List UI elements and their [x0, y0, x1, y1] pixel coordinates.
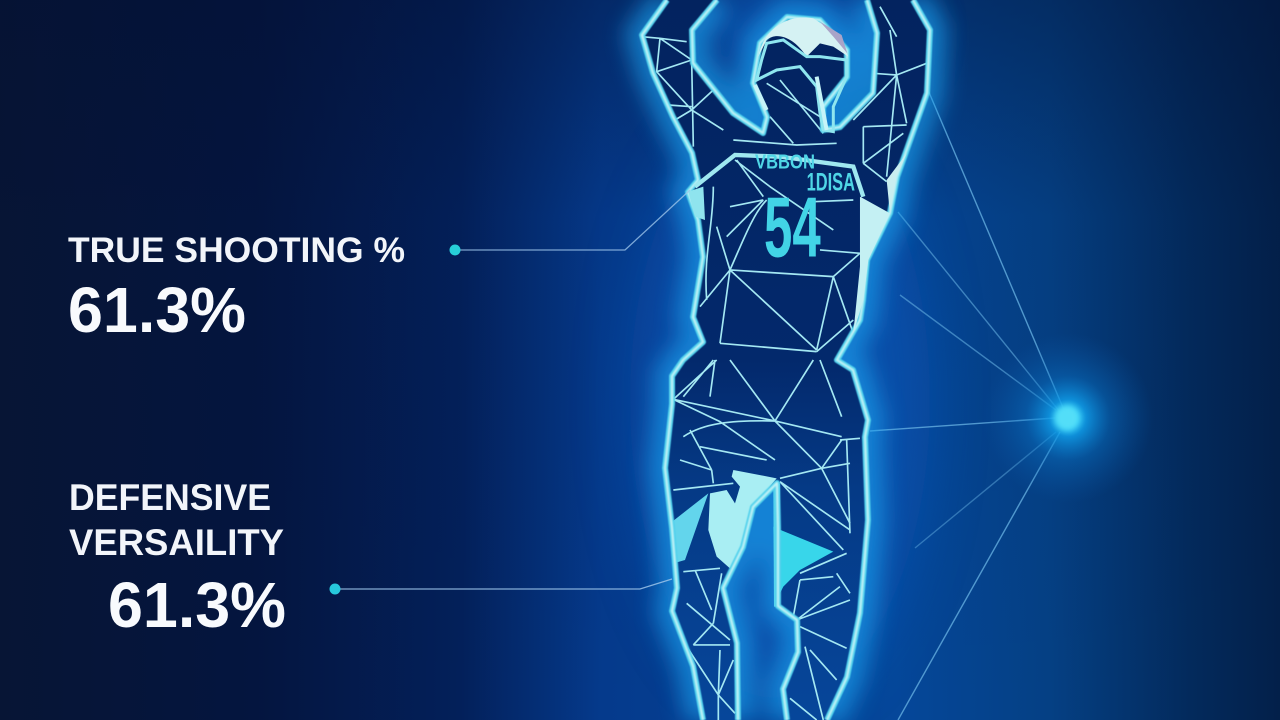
- jersey detail: 1DISA: [807, 169, 855, 197]
- figure outline: [642, 0, 930, 720]
- wireframe mesh: lower body: [673, 360, 860, 720]
- glowing light node: [983, 333, 1153, 503]
- leader line: [335, 579, 672, 589]
- light node connector lines: [870, 90, 1064, 720]
- callout: true shooting: [68, 190, 690, 346]
- value: 61.3%: [68, 274, 246, 346]
- value: 61.3%: [108, 569, 286, 641]
- figure body fill: [642, 0, 930, 720]
- label: TRUE SHOOTING %: [68, 230, 405, 270]
- callout: defensive versaility: [69, 477, 672, 641]
- wireframe mesh: upper body: [642, 7, 927, 352]
- leader line: [455, 190, 690, 250]
- leader dot: [330, 584, 340, 594]
- jersey lettering: VBBON: [755, 150, 815, 173]
- figure glow: [642, 0, 930, 720]
- label line 1: DEFENSIVE: [69, 477, 271, 518]
- player figure: wireframe silhouette: [642, 0, 930, 720]
- jersey number: 54: [764, 181, 821, 276]
- jersey detail: [688, 150, 907, 333]
- bright thigh highlights: [670, 470, 833, 607]
- head detail: [755, 17, 848, 132]
- label line 2: VERSAILITY: [69, 522, 284, 563]
- leader dot: [450, 244, 460, 256]
